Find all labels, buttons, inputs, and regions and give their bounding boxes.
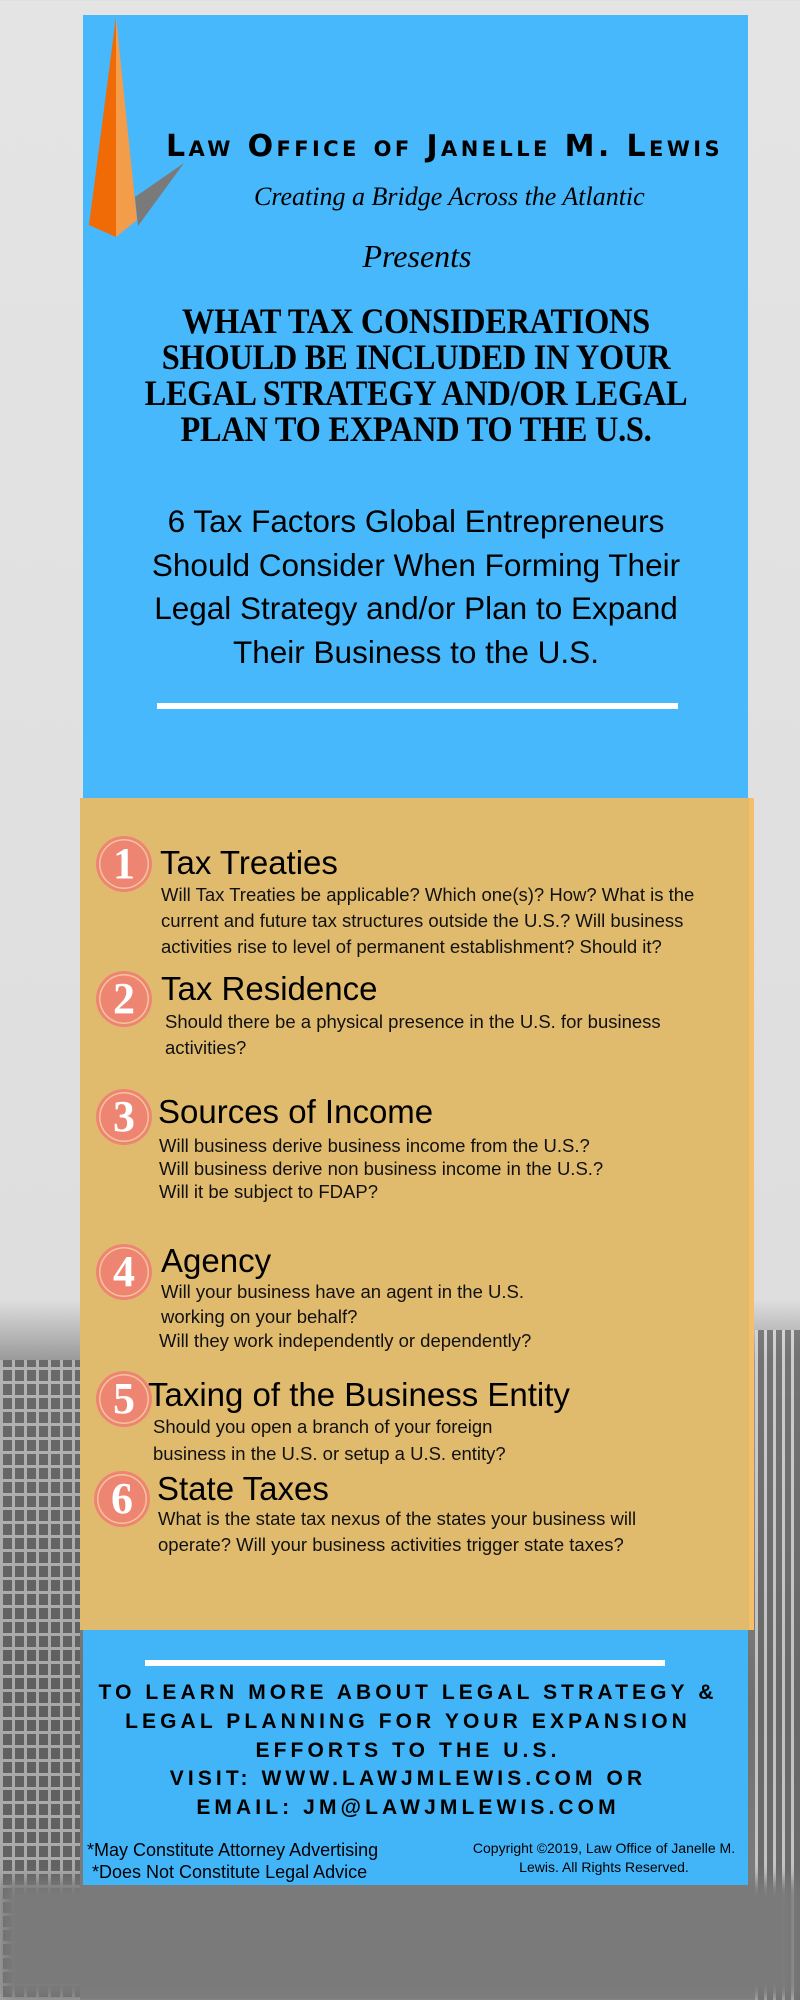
text: body 1: activities rise to level of permanent establishment? Should it? [161,936,662,957]
icon: number 6: 6 [111,1474,133,1523]
disclaimers [87,1840,378,1882]
call to action [98,1681,717,1819]
text: body 1 [161,884,694,957]
item 2: tax residence [96,970,661,1058]
heading: State Taxes: State Taxes [157,1470,329,1507]
heading: Tax Treaties: Tax Treaties [160,844,338,881]
disclaimers: *May Constitute Attorney Advertising [87,1840,378,1860]
subtitle: Their Business to the U.S. [233,634,599,670]
call to action: TO LEARN MORE ABOUT LEGAL STRATEGY & [99,1681,717,1704]
text: body 4: Will they work independently or dependently? [159,1330,531,1351]
disclaimers: *Does Not Constitute Legal Advice [92,1862,367,1882]
item 1: tax treaties [96,836,694,957]
panel: header (blue) [83,15,748,798]
text: body 3: Will it be subject to FDAP? [159,1181,378,1202]
title: PLAN TO EXPAND TO THE U.S. [180,409,652,449]
copyright: Copyright ©2019, Law Office of Janelle M. Lewis. All Rights Reserved. [473,1840,735,1875]
heading: Tax Residence: Tax Residence [161,970,377,1007]
text: body 5 [153,1416,506,1464]
subtitle: Legal Strategy and/or Plan to Expand [154,590,678,626]
text: body 6: What is the state tax nexus of the states your business will [158,1508,636,1529]
title: LEGAL STRATEGY AND/OR LEGAL [145,373,687,413]
item 6: state taxes [94,1470,636,1555]
title: WHAT TAX CONSIDERATIONS [182,301,650,341]
heading: Taxing of the Business Entity: Taxing of the Business Entity [148,1376,570,1413]
subtitle: Should Consider When Forming Their [152,546,680,582]
call to action: EFFORTS TO THE U.S. [255,1739,561,1762]
icon: logo spike [89,17,184,237]
icon: number 6 [94,1471,150,1527]
heading: firm name: Law Office of Janelle M. Lewis [166,129,723,164]
icon: number 1: 1 [113,839,135,888]
text: body 5: Should you open a branch of your foreign [153,1416,492,1437]
text: body 2 [165,1011,661,1058]
text: body 2: Should there be a physical presence in the U.S. for business [165,1011,661,1032]
text: body 1: current and future tax structures outside the U.S.? Will business [161,910,683,931]
item 3: sources of income [96,1089,603,1202]
title [145,301,687,449]
text: presents: Presents [362,238,472,274]
text: body 3: Will business derive business income from the U.S.? [159,1135,590,1156]
icon: number 2 [96,971,152,1027]
tagline: Creating a Bridge Across the Atlantic [254,182,645,211]
subtitle: 6 Tax Factors Global Entrepreneurs [168,503,664,539]
call to action: EMAIL: JM@LAWJMLEWIS.COM [196,1796,620,1819]
text: body 3: Will business derive non business income in the U.S.? [159,1158,603,1179]
icon: number 3 [96,1089,152,1145]
heading: Agency: Agency [161,1242,271,1279]
text: body 2: activities? [165,1037,246,1058]
text: body 4: Will your business have an agent in the U.S. [161,1281,524,1302]
text: body 5: business in the U.S. or setup a U.S. entity? [153,1443,506,1464]
title: SHOULD BE INCLUDED IN YOUR [162,337,670,377]
icon: number 5: 5 [113,1374,135,1423]
subtitle [152,503,680,670]
icon: number 4 [96,1244,152,1300]
icon: number 3: 3 [113,1092,135,1141]
text: body 4: working on your behalf? [161,1306,357,1326]
icon: number 4: 4 [113,1247,135,1296]
icon: number 5 [96,1371,152,1427]
text: body 4 [159,1281,531,1351]
item 4: agency [96,1242,531,1351]
background: city buildings [0,1330,800,2000]
panel: footer (blue) [83,1630,748,1885]
text: body 1: Will Tax Treaties be applicable? Which one(s)? How? What is the [161,884,694,905]
call to action: VISIT: WWW.LAWJMLEWIS.COM OR [170,1767,646,1790]
panel: tax factors (gold) [80,798,754,1630]
icon: number 1 [96,836,152,892]
heading: Sources of Income: Sources of Income [158,1093,433,1130]
text: body 6: operate? Will your business activities trigger state taxes? [158,1534,624,1555]
item 5: taxing of the business entity [96,1371,570,1464]
icon: number 2: 2 [113,974,135,1023]
call to action: LEGAL PLANNING FOR YOUR EXPANSION [125,1710,691,1733]
text: body 3 [159,1135,603,1202]
text: body 6 [158,1508,636,1555]
